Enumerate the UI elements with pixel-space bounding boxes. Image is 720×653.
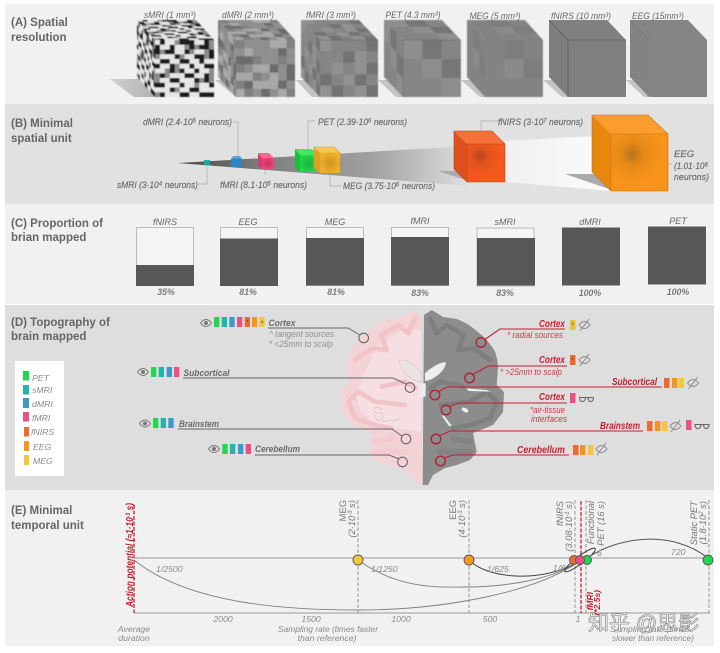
bar: EEG 81%: EEG (238, 217, 258, 227)
axis labels: 1000 (391, 614, 411, 624)
cube labels: sMRI (3·10⁴ neurons) (117, 180, 198, 191)
legend: fNIRS (31, 427, 54, 437)
panel: minimal temporal unit (5, 490, 714, 646)
bar: sMRI 83%: 83% (496, 288, 514, 298)
brain: unmapped right hemisphere (423, 310, 504, 485)
cube labels (117, 117, 709, 192)
rotated labels: fNIRS (554, 500, 565, 526)
cube labels: MEG (5 mm³) (470, 11, 520, 21)
fraction labels: 1/625 (487, 564, 509, 574)
axis labels: Sampling rate (times faster (278, 624, 379, 634)
left region: cortex chips and labels: ^ (261, 321, 264, 327)
heading: minimal temporal unit: (E) Minimal (11, 505, 72, 517)
cube labels: sMRI (1 mm³) (144, 10, 196, 20)
cube labels: dMRI (2.4·10⁵ neurons) (143, 117, 232, 128)
right region: cortex radial sources (507, 319, 590, 340)
rotated labels: -3 (458, 510, 464, 516)
rotated labels: Action potential (≈1·10 (125, 500, 136, 607)
right region: brainstem: Brainstem (600, 421, 640, 432)
rotated labels: -3 (348, 510, 354, 516)
rotated labels: s) (346, 500, 357, 510)
cube labels: fNIRS (10 mm³) (551, 11, 611, 21)
bar: EEG 81% (220, 217, 278, 297)
bar: MEG 81%: MEG (325, 217, 345, 227)
bar: sMRI 83% (477, 217, 535, 298)
cube: dMRI 2 mm3 (218, 20, 295, 97)
left region: cortex chips and labels: ^ tangent sources (269, 328, 334, 339)
right region: subcortical (612, 377, 698, 389)
left region: subcortical: Subcortical (184, 368, 230, 379)
rotated labels: s) (697, 501, 708, 511)
axis labels (117, 614, 694, 643)
cube labels: dMRI (2 mm³) (222, 10, 274, 20)
rotated labels: 2 (699, 511, 705, 516)
legend: PET (32, 373, 50, 383)
cube labels: EEG (674, 149, 695, 160)
shadows under cubes (110, 79, 652, 97)
legend: dMRI (32, 399, 53, 409)
rotated labels: (1.8·10 (697, 515, 708, 544)
left region: brainstem: Brainstem (179, 419, 219, 430)
right region: cortex air-tissue: Cortex (539, 392, 565, 403)
cube labels: (1.01·10⁸ (674, 161, 708, 172)
right region: subcortical: Subcortical (612, 377, 657, 388)
cube labels: fNIRS (3·10⁷ neurons) (498, 117, 583, 128)
fraction labels: 1/1250 (371, 564, 398, 574)
legend (15, 361, 64, 476)
heading: minimal temporal unit: temporal unit (11, 520, 84, 532)
cube: fNIRS unit (454, 131, 505, 182)
bar: fMRI 83%: fMRI (410, 216, 430, 226)
cube: dMRI unit (231, 156, 242, 167)
rotated labels: EEG (447, 500, 458, 520)
cube: sMRI 1 mm3 (137, 20, 214, 97)
axis labels: duration (118, 633, 150, 643)
panel: minimal spatial unit (5, 104, 714, 204)
cube: MEG 5 mm3 (467, 20, 543, 97)
rotated labels (125, 500, 708, 616)
heading: topography: (D) Topography of (11, 317, 110, 329)
left region: cortex chips and labels: * <25mm to scalp (269, 338, 333, 349)
left region: cortex chips and labels: Cortex (268, 318, 296, 329)
axis labels: 1500 (301, 614, 321, 624)
cube: sMRI unit (204, 160, 210, 166)
cube: PET 4.3 mm3 (384, 20, 461, 97)
right region: cerebellum: Cerebellum (517, 445, 565, 456)
rotated labels: (4·10 (456, 516, 467, 538)
bar: dMRI 100%: dMRI (579, 217, 601, 227)
heading: proportion of brain mapped: (C) Proportion of (11, 218, 103, 230)
legend: MEG (33, 456, 53, 466)
modality markers (134, 500, 709, 613)
cube labels: fMRI (3 mm³) (306, 10, 356, 20)
right region: cortex air-tissue (530, 392, 594, 424)
cube: fNIRS 10 mm3 (549, 20, 626, 97)
left region: cortex chips and labels (200, 317, 334, 349)
cube labels: PET (4.3 mm³) (386, 10, 440, 20)
rotated labels: s) (563, 501, 574, 511)
axis labels: Average (117, 624, 150, 634)
axis labels: than reference) (298, 633, 357, 643)
bar: fMRI 83%: 83% (411, 288, 429, 298)
cube: fMRI 3 mm3 (301, 20, 378, 97)
bar: PET 100%: 100% (667, 287, 689, 297)
fraction labels: 6 (597, 548, 602, 558)
cube labels: PET (2.39·10⁶ neurons) (318, 117, 407, 128)
rotated labels: -1 (565, 511, 571, 517)
legend: fMRI (32, 413, 51, 423)
cube labels (144, 10, 684, 21)
timeline points (353, 555, 713, 565)
legend: sMRI (32, 385, 53, 395)
bar: dMRI 100%: 100% (579, 288, 601, 298)
timeline axes (134, 558, 710, 613)
cube: PET unit (295, 149, 317, 172)
left region: cerebellum: Cerebellum (255, 444, 300, 455)
axis labels: Sampling rate (times (610, 624, 690, 634)
right region: cortex air-tissue: *air-tissue (530, 404, 565, 415)
fraction labels (156, 547, 686, 574)
rotated labels: PET (16 s) (595, 501, 606, 546)
axis labels: 2000 (212, 614, 233, 624)
right region: cortex deep: * (572, 358, 575, 364)
bar: PET 100%: PET (669, 216, 688, 226)
bar: MEG 81%: 81% (327, 287, 345, 297)
legend: EEG (33, 442, 52, 452)
left region: cerebellum (208, 444, 300, 455)
bar: sMRI 83%: sMRI (494, 217, 516, 227)
right region: cortex radial sources: * (572, 323, 575, 329)
right region: cortex deep (500, 354, 590, 377)
heading: spatial resolution: (A) Spatial (11, 17, 68, 29)
axis labels: slower than reference) (612, 633, 694, 643)
rotated labels: fMRI (585, 591, 595, 610)
wedge: scale shadows (178, 135, 615, 191)
bar: fNIRS 35%: 35% (157, 287, 175, 297)
rotated labels: Static PET (688, 500, 699, 545)
fraction labels: 720 (671, 547, 686, 557)
right region: cortex deep: Cortex (539, 355, 565, 366)
bar: fNIRS 35%: fNIRS (153, 217, 177, 227)
left region: cortex chips and labels: * (246, 320, 249, 326)
left region: subcortical (138, 367, 230, 379)
right region: cerebellum (517, 443, 607, 456)
rotated labels: (3.08·10 (563, 517, 574, 552)
rotated labels: MEG (337, 500, 348, 521)
cube labels: MEG (3.75·10⁶ neurons) (343, 181, 435, 192)
left callout lines (178, 328, 415, 467)
bar: dMRI 100% (562, 217, 620, 298)
cube: MEG unit (314, 147, 340, 173)
brain: mapped left hemisphere (341, 310, 427, 485)
heading: spatial resolution: resolution (11, 32, 67, 44)
watermark: 知乎 @思影 (588, 612, 699, 635)
panel: spatial resolution (5, 4, 714, 104)
rotated labels: s) (125, 502, 136, 513)
rotated labels: s) (456, 500, 467, 510)
heading: minimal spatial unit: (B) Minimal (11, 118, 73, 130)
heading: proportion of brain mapped: brian mapped (11, 232, 86, 244)
rotated labels: (2·10 (346, 516, 357, 538)
fraction labels: 1/8 (553, 563, 565, 573)
cube: fMRI unit (258, 153, 274, 169)
axis labels: 500 (483, 614, 497, 624)
right region: cortex radial sources: Cortex (539, 319, 565, 330)
rotated labels: (*2.5s) (592, 590, 602, 616)
cube labels: fMRI (8.1·10⁵ neurons) (220, 180, 307, 191)
right region: cortex air-tissue: interfaces (531, 413, 567, 424)
fraction labels: 1/2500 (156, 564, 183, 574)
bar: fNIRS 35% (136, 217, 194, 297)
right callout lines (430, 329, 662, 466)
bar: MEG 81% (306, 217, 364, 297)
leader lines (198, 121, 672, 186)
panel: topography of brain mapped (5, 305, 714, 490)
right region: cortex deep: * >25mm to scalp (500, 366, 562, 377)
axis labels: 1 (576, 614, 581, 624)
cube labels: EEG (15mm³) (632, 11, 684, 21)
panel: proportion of brain mapped (5, 204, 714, 304)
bar: EEG 81%: 81% (239, 287, 257, 297)
right region: cortex radial sources: * radial sources (507, 329, 563, 340)
arcs between modalities (134, 539, 708, 610)
cube: EEG unit (592, 115, 668, 191)
cube labels: neurons) (674, 172, 709, 183)
right region: brainstem (600, 420, 710, 432)
heading: topography: brain mapped (11, 331, 86, 343)
rotated labels: -3 (126, 512, 132, 517)
bar: fMRI 83% (391, 216, 449, 298)
bar: PET 100% (648, 216, 706, 297)
rotated labels: Functional (585, 500, 596, 544)
heading: minimal spatial unit: spatial unit (11, 133, 72, 145)
cube: EEG 15 mm3 (630, 20, 707, 97)
left region: brainstem (140, 418, 219, 430)
